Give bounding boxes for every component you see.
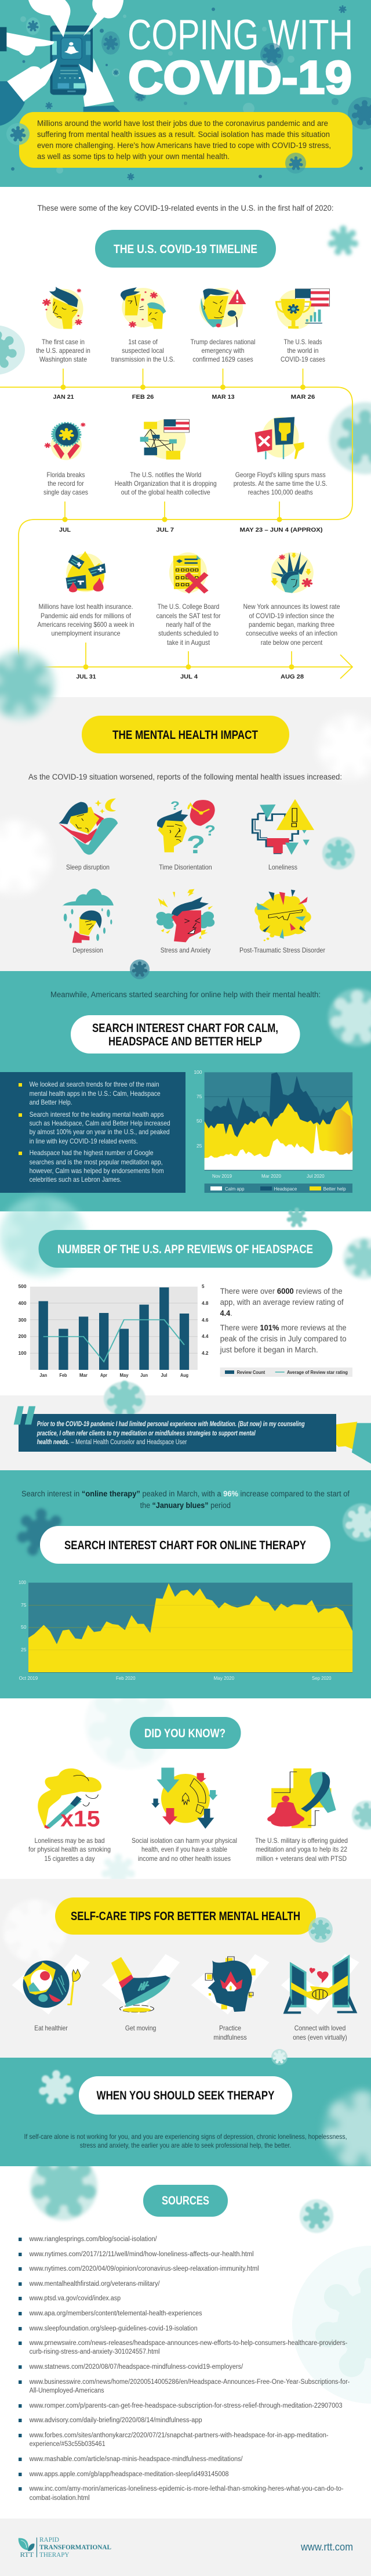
panel: timeline section xyxy=(0,187,371,697)
labels: self-care tips: ones (even virtually) xyxy=(293,2033,347,2041)
timeline events: captions: suspected local xyxy=(122,347,164,355)
captions: did you know facts: for physical health as smoking xyxy=(28,1845,111,1853)
area chart: search interest for Calm, Headspace, Better Help xyxy=(194,1069,352,1193)
timeline events: captions: The U.S. leads xyxy=(284,338,322,346)
text block: online therapy search interest: the “January blues” period xyxy=(140,1501,231,1510)
labels: self-care tips: mindfulness xyxy=(213,2033,247,2041)
area chart: online therapy search interest: Feb 2020 xyxy=(116,1675,136,1681)
heading: when you should seek therapy xyxy=(79,2076,292,2115)
area chart: online therapy search interest: 75 xyxy=(21,1602,27,1608)
timeline dates: JUL 31 xyxy=(77,674,96,680)
combo chart: review count and star rating: 5 xyxy=(202,1284,205,1289)
area chart: online therapy search interest: Sep 2020 xyxy=(312,1675,332,1681)
timeline events: captions: Pandemic aid ends for millions of xyxy=(41,612,132,620)
timeline dates: MAY 23 – JUN 4 (APPROX) xyxy=(240,527,322,533)
heading: self-care tips: SELF-CARE TIPS FOR BETTER MENTAL HEALTH xyxy=(71,1910,300,1923)
source list: www.advisory.com/daily-briefing/2020/08/14/mindfulness-app xyxy=(29,2417,202,2424)
logo: Rapid Transformational Therapy: TRANSFORMATIONAL xyxy=(39,2544,111,2551)
intro sentence: As the COVID-19 situation worsened, reports of the following mental health issues increased: xyxy=(28,773,342,781)
panel: search trend bullet points: celebrities such as Lebron James. xyxy=(30,1175,122,1184)
intro callout: suffering from mental health issues as a result. Social isolation has made this situation xyxy=(37,130,330,139)
icon: record rosette xyxy=(44,423,86,460)
panel: did you know xyxy=(28,1698,371,1879)
combo chart: review count and star rating: 200 xyxy=(19,1334,27,1339)
captions: did you know facts: million + veterans deal with PTSD xyxy=(256,1855,347,1863)
labels: mental health issues: Post-Traumatic Stress Disorder xyxy=(239,946,325,954)
combo chart: review count and star rating: Jan xyxy=(39,1373,47,1378)
text block: review statistics xyxy=(220,1286,347,1354)
timeline events: captions: single day cases xyxy=(43,488,88,496)
timeline events: captions: the record for xyxy=(48,479,84,488)
area chart: online therapy search interest: 100 xyxy=(19,1579,26,1585)
heading: search interest chart for Calm, Headspace and Better Help xyxy=(71,1015,300,1054)
timeline events: captions: reaches 100,000 deaths xyxy=(248,488,313,496)
combo chart: review count and star rating: Jul xyxy=(161,1373,167,1378)
logo: Rapid Transformational Therapy: RAPID xyxy=(39,2537,59,2543)
timeline events: captions: New York announces its lowest rate xyxy=(243,602,340,611)
quote box xyxy=(19,1414,336,1452)
source list: combat-isolation.html xyxy=(30,2495,90,2502)
timeline events: captions: nearly half of the xyxy=(166,620,211,629)
timeline events: captions: out of the global health collective xyxy=(121,488,210,496)
text block: therapy advice: stress and anxiety, the earlier you are able to seek professional help, the better. xyxy=(80,2141,291,2149)
panel: search trend bullet points: searches and is the most popular meditation app, xyxy=(30,1158,163,1166)
timeline dates: JUL 4 xyxy=(180,674,198,680)
source list xyxy=(19,2236,350,2502)
heading: search interest chart for online therapy xyxy=(40,1526,330,1564)
combo chart: review count and star rating: Jun xyxy=(140,1373,148,1378)
timeline path with arrow xyxy=(0,369,352,679)
source list: www.rianglesprings.com/blog/social-isolation/ xyxy=(29,2236,157,2243)
area chart: search interest for Calm, Headspace, Better Help: 75 xyxy=(197,1094,202,1099)
icon: cigarette smoke x15: x15 xyxy=(60,1806,100,1832)
icon: first case, sick man xyxy=(42,287,83,329)
heading: did you know xyxy=(130,1717,241,1749)
icon: burning health insurance cards xyxy=(66,551,106,592)
heading: the U.S. COVID-19 timeline: THE U.S. COVID-19 TIMELINE xyxy=(114,243,257,256)
timeline events: captions: Millions have lost health insurance. xyxy=(38,602,133,611)
source list: www.sleepfoundation.org/sleep-guidelines-covid-19-isolation xyxy=(29,2325,198,2332)
captions: did you know facts xyxy=(28,1837,348,1863)
timeline events: captions: confirmed 1629 cases xyxy=(192,355,253,363)
panel: hero header xyxy=(0,0,371,187)
area chart: search interest for Calm, Headspace, Better Help: Mar 2020 xyxy=(261,1173,281,1179)
combo chart: review count and star rating: Feb xyxy=(59,1373,67,1378)
heading: sources: SOURCES xyxy=(162,2194,209,2207)
heading: search interest chart for Calm, Headspace and Better Help: SEARCH INTEREST CHART FOR CALM, xyxy=(92,1022,278,1035)
text block: review statistics: peak of the crisis in July compared to xyxy=(220,1334,347,1343)
panel: search trend bullet points: by almost 100% year on year in the U.S., and peaked xyxy=(30,1128,170,1136)
panel: search trend bullet points xyxy=(0,1072,186,1193)
panel: search trend bullet points: in line with key COVID-19 related events. xyxy=(30,1137,138,1145)
timeline events: captions: Washington state xyxy=(39,355,87,363)
chart legend: Headspace xyxy=(274,1186,297,1192)
timeline events: captions: The first case in xyxy=(42,338,85,346)
panel: online search interest xyxy=(0,959,371,1211)
timeline events: captions: consecutive weeks of an infection xyxy=(246,629,337,637)
area chart: search interest for Calm, Headspace, Better Help: Nov 2019 xyxy=(212,1173,232,1179)
source list: www.apa.org/members/content/telemental-health-experiences xyxy=(29,2310,202,2317)
panel: search trend bullet points: mental health apps in the U.S.: Calm, Headspace xyxy=(30,1089,161,1098)
logo: Rapid Transformational Therapy: THERAPY xyxy=(39,2552,70,2559)
timeline events: captions: emergency with xyxy=(202,347,245,355)
panel: search trend bullet points: We looked at search trends for three of the main xyxy=(30,1080,159,1088)
labels: mental health issues: Stress and Anxiety xyxy=(161,946,210,954)
source list: www.mashable.com/article/snap-minis-headspace-mindfulness-meditations/ xyxy=(29,2456,243,2463)
combo chart: review count and star rating: 500 xyxy=(19,1284,27,1289)
intro sentence: Meanwhile, Americans started searching for online help with their mental health: xyxy=(50,990,321,999)
panel: search trend bullet points: Headspace had the highest number of Google xyxy=(30,1149,154,1157)
timeline events: captions: Florida breaks xyxy=(46,471,85,479)
source list: www.mentalhealthfirstaid.org/veterans-military/ xyxy=(29,2281,160,2288)
timeline events: captions: of COVID-19 infection since the xyxy=(249,612,334,620)
panel: self-care tips xyxy=(0,1879,371,2058)
captions: did you know facts: health, even if you have a stable xyxy=(141,1845,227,1853)
combo chart: review count and star rating: 100 xyxy=(19,1351,27,1356)
icon: cancelled SAT test xyxy=(169,553,207,593)
captions: did you know facts: Loneliness may be as bad xyxy=(35,1837,104,1845)
captions: did you know facts: meditation and yoga to help its 22 xyxy=(256,1845,347,1853)
labels: mental health issues: Sleep disruption xyxy=(66,863,110,871)
source list: www.inc.com/amy-morin/americas-loneliness-epidemic-is-more-lethal-than-smoking-heres-what-you-can-do-to- xyxy=(29,2485,344,2492)
text block: review statistics: 4.4. xyxy=(220,1308,232,1318)
icon: time disorientation: ? xyxy=(205,822,216,839)
quote box: – Mental Health Counselor and Headspace User xyxy=(71,1439,187,1446)
source list: www.ptsd.va.gov/covid/index.asp xyxy=(29,2295,121,2302)
intro callout xyxy=(19,112,352,168)
timeline events: captions: George Floyd's killing spurs mass xyxy=(235,471,326,479)
timeline events: captions: transmission in the U.S. xyxy=(111,355,175,363)
timeline events: captions: unemployment insurance xyxy=(51,629,121,637)
combo chart: review count and star rating: 300 xyxy=(19,1318,27,1323)
area chart: search interest for Calm, Headspace, Better Help: 100 xyxy=(194,1069,202,1075)
icon: quote marks xyxy=(14,1406,35,1424)
timeline events: captions: 1st case of xyxy=(128,338,158,346)
labels: mental health issues xyxy=(66,863,325,954)
icon: post-traumatic stress disorder xyxy=(254,890,311,941)
intro callout: even more challenging. Here's how Americans have tried to cope with COVID-19 stress, xyxy=(37,141,331,150)
chart legend: Better help xyxy=(323,1186,346,1192)
text block: review statistics: There were 101% more reviews at the xyxy=(220,1323,347,1332)
logo: Rapid Transformational Therapy: RTT xyxy=(20,2552,34,2559)
timeline events: captions: the U.S. appeared in xyxy=(36,347,90,355)
timeline events: captions xyxy=(36,338,340,647)
source list: www.nytimes.com/2020/04/09/opinion/coronavirus-sleep-relaxation-immunity.html xyxy=(29,2265,259,2272)
heading: the U.S. COVID-19 timeline xyxy=(95,230,276,268)
timeline events: captions: protests. At the same time the U.S. xyxy=(234,479,328,488)
title: Coping with COVID-19 xyxy=(128,12,353,104)
icon: protest signs xyxy=(255,417,304,459)
source list: www.businesswire.com/news/home/20200514005286/en/Headspace-Announces-Free-One-Year-Subscriptions-for- xyxy=(29,2379,350,2386)
labels: mental health issues: Time Disorientation xyxy=(159,863,212,871)
area chart: search interest for Calm, Headspace, Better Help: 50 xyxy=(197,1118,202,1124)
source list: experience/#53c55b035461 xyxy=(30,2441,106,2448)
captions: did you know facts: income and no other health issues xyxy=(138,1855,231,1863)
heading: self-care tips xyxy=(55,1897,316,1935)
icon: walking shoe xyxy=(111,1957,170,2012)
icon: mindful head xyxy=(205,1957,256,2012)
timeline events: captions: cancels the SAT test for xyxy=(157,612,221,620)
combo chart: review count and star rating: 4.4 xyxy=(202,1334,209,1339)
timeline events: captions: the world in xyxy=(288,347,319,355)
title: Coping with COVID-19: COVID-19 xyxy=(128,52,352,104)
icon: Statue of Liberty xyxy=(271,551,314,593)
white check marks behind icons xyxy=(12,1954,359,2015)
chart legend: Calm app xyxy=(225,1186,245,1192)
timeline dates: JUL 7 xyxy=(156,527,174,533)
text block: review statistics: just before it began in March. xyxy=(220,1345,318,1354)
icon: time disorientation: ? xyxy=(187,831,205,859)
text block: review statistics: There were over 6000 reviews of the xyxy=(220,1286,343,1296)
timeline events: captions: take it in August xyxy=(167,638,210,647)
source list: www.nytimes.com/2017/12/11/well/mind/how-loneliness-affects-our-health.html xyxy=(29,2251,254,2258)
combo chart: review count and star rating: 4.6 xyxy=(202,1318,209,1323)
area chart: search interest for Calm, Headspace, Better Help: Jul 2020 xyxy=(307,1173,325,1179)
area chart: online therapy search interest: 50 xyxy=(21,1624,27,1630)
panel: mental health impact xyxy=(0,650,371,971)
intro sentence: These were some of the key COVID-19-related events in the U.S. in the first half of 2020: xyxy=(37,204,334,212)
intro callout: Millions around the world have lost their jobs due to the coronavirus pandemic and are xyxy=(37,119,328,128)
heading: the mental health impact: THE MENTAL HEALTH IMPACT xyxy=(112,728,258,742)
source list: curb-rising-stress-and-anxiety-301024557.html xyxy=(30,2348,160,2355)
quote box: health needs. xyxy=(37,1439,70,1446)
heading: search interest chart for Calm, Headspace and Better Help: HEADSPACE AND BETTER HELP xyxy=(108,1035,262,1048)
combo chart: review count and star rating: Mar xyxy=(79,1373,88,1378)
source list: www.prnewswire.com/news-releases/headspace-announces-new-efforts-to-help-consumers-healthcare-providers- xyxy=(29,2340,347,2347)
icon: cigarette smoke x15 xyxy=(38,1769,101,1832)
combo chart: review count and star rating: Apr xyxy=(100,1373,107,1378)
area chart: online therapy search interest: 25 xyxy=(21,1647,27,1653)
combo chart: review count and star rating: Aug xyxy=(180,1373,188,1378)
panel: search trend bullet points: Search interest for the leading mental health apps xyxy=(30,1110,164,1119)
website address: www.rtt.com xyxy=(300,2541,353,2553)
panel: when to seek therapy xyxy=(0,2049,371,2170)
text block: therapy advice xyxy=(24,2133,347,2149)
combo chart: review count and star rating: 4.2 xyxy=(202,1351,209,1356)
icon: loneliness xyxy=(253,799,314,855)
timeline events: captions: COVID-19 cases xyxy=(281,355,325,363)
area chart: search interest for Calm, Headspace, Better Help: 25 xyxy=(197,1143,202,1149)
text block: online therapy search interest xyxy=(21,1489,350,1510)
icon: connecting through screens xyxy=(283,1954,357,2014)
timeline events: captions: pandemic began, marking three xyxy=(249,620,334,629)
source list: www.apps.apple.com/gb/app/headspace-meditation-sleep/id493145008 xyxy=(29,2471,229,2478)
heading: when you should seek therapy: WHEN YOU SHOULD SEEK THERAPY xyxy=(96,2089,275,2102)
icon: local transmission, two heads xyxy=(121,287,166,329)
combo chart: review count and star rating xyxy=(19,1284,209,1378)
panel: sources xyxy=(19,2166,371,2500)
labels: self-care tips: Practice xyxy=(219,2024,241,2032)
area chart: online therapy search interest xyxy=(19,1579,352,1681)
combo chart: review count and star rating: 400 xyxy=(19,1301,27,1306)
icon: time disorientation: ? xyxy=(170,799,180,813)
icon: time disorientation xyxy=(157,799,216,859)
labels: self-care tips xyxy=(34,2024,347,2041)
intro callout: as well as some tips to help with your own mental health. xyxy=(37,152,230,161)
combo chart: review count and star rating: May xyxy=(119,1373,129,1378)
heading: search interest chart for online therapy: SEARCH INTEREST CHART FOR ONLINE THERAPY xyxy=(64,1539,306,1552)
timeline dates: MAR 26 xyxy=(291,394,315,401)
panel: Headspace app reviews xyxy=(0,1196,371,1395)
heading: number of the U.S. app reviews of Headspace xyxy=(38,1230,333,1268)
heading: did you know: DID YOU KNOW? xyxy=(144,1727,225,1740)
combo chart: review count and star rating: 4.8 xyxy=(202,1301,209,1306)
icon: trophy and flag xyxy=(277,289,330,329)
chart legend xyxy=(220,1368,352,1377)
timeline dates: JUL xyxy=(59,527,71,533)
source list: All-Unemployed-Americans xyxy=(30,2387,104,2394)
timeline events: captions: The U.S. College Board xyxy=(158,602,219,611)
panel: quote xyxy=(0,1381,371,1470)
chart legend xyxy=(205,1184,352,1193)
labels: self-care tips: Connect with loved xyxy=(294,2024,345,2032)
heading: sources xyxy=(143,2185,228,2217)
source list: www.romper.com/p/parents-can-get-free-headspace-subscription-for-stress-relief-through-meditation-22907003 xyxy=(29,2402,343,2409)
labels: mental health issues: Loneliness xyxy=(268,863,297,871)
labels: mental health issues: Depression xyxy=(72,946,103,954)
icon: WHO network and flag xyxy=(140,420,190,460)
heading: number of the U.S. app reviews of Headspace: NUMBER OF THE U.S. APP REVIEWS OF HEADSPACE xyxy=(57,1243,313,1256)
timeline dates: MAR 13 xyxy=(212,394,235,401)
illustration: person behind quote xyxy=(318,1422,371,1464)
captions: did you know facts: The U.S. military is offering guided xyxy=(255,1837,348,1845)
timeline dates: FEB 26 xyxy=(132,394,154,401)
timeline dates xyxy=(53,394,322,680)
timeline events: captions: Health Organization that it is dropping xyxy=(115,479,217,488)
icon: military meditation and ribbon xyxy=(267,1769,336,1828)
panel: online therapy xyxy=(0,1470,371,1698)
labels: self-care tips: Eat healthier xyxy=(34,2024,68,2032)
timeline events: captions: Trump declares national xyxy=(190,338,255,346)
captions: did you know facts: Social isolation can harm your physical xyxy=(132,1837,237,1845)
chart legend: Review Count xyxy=(237,1370,265,1375)
timeline dates: AUG 28 xyxy=(281,674,304,680)
text block: review statistics: app, with an average review rating of xyxy=(220,1297,344,1307)
icon: social isolation arrows xyxy=(151,1767,218,1829)
source list: www.forbes.com/sites/anthonykarcz/2020/07/21/snapchat-partners-with-headspace-for-in-app-meditation- xyxy=(29,2432,329,2439)
quote box: practice, I often refer clients to try meditation or mindfulness strategies to support mental xyxy=(37,1430,256,1437)
captions: did you know facts: 15 cigarettes a day xyxy=(44,1855,95,1863)
icon: national emergency xyxy=(199,288,246,327)
area chart: online therapy search interest: Oct 2019 xyxy=(19,1675,38,1681)
panel: search trend bullet points: such as Headspace, Calm and Better Help increased xyxy=(30,1119,170,1127)
panel: search trend bullet points: however, Calm was helped by endorsements from xyxy=(30,1167,164,1175)
timeline events: captions: students scheduled to xyxy=(158,629,219,637)
timeline dates: JAN 21 xyxy=(53,394,74,401)
area chart: online therapy search interest: May 2020 xyxy=(214,1675,234,1681)
text block: online therapy search interest: Search interest in “online therapy” peaked in March, with a 96% increase compared to the start of xyxy=(21,1489,350,1498)
timeline events: captions: rate below one percent xyxy=(261,638,323,647)
illustration: hands tapping a meditation app on a phone xyxy=(0,0,123,126)
labels: self-care tips: Get moving xyxy=(125,2024,156,2032)
source list: www.statnews.com/2020/08/07/headspace-mindfulness-covid19-employers/ xyxy=(29,2364,243,2371)
timeline events: captions: Americans receiving $600 a week in xyxy=(37,620,134,629)
panel: search trend bullet points: and Better Help. xyxy=(30,1098,72,1106)
logo: Rapid Transformational Therapy xyxy=(19,2537,111,2559)
heading: the mental health impact xyxy=(82,716,289,753)
panel: footer xyxy=(0,2519,371,2576)
chart legend: Average of Review star rating xyxy=(287,1370,348,1375)
icon: sleep disruption xyxy=(59,799,118,854)
timeline events: captions: The U.S. notifies the World xyxy=(130,471,201,479)
icon: depression xyxy=(63,889,114,943)
icon: healthy plate xyxy=(23,1961,81,2008)
icon: stress and anxiety xyxy=(156,889,214,942)
